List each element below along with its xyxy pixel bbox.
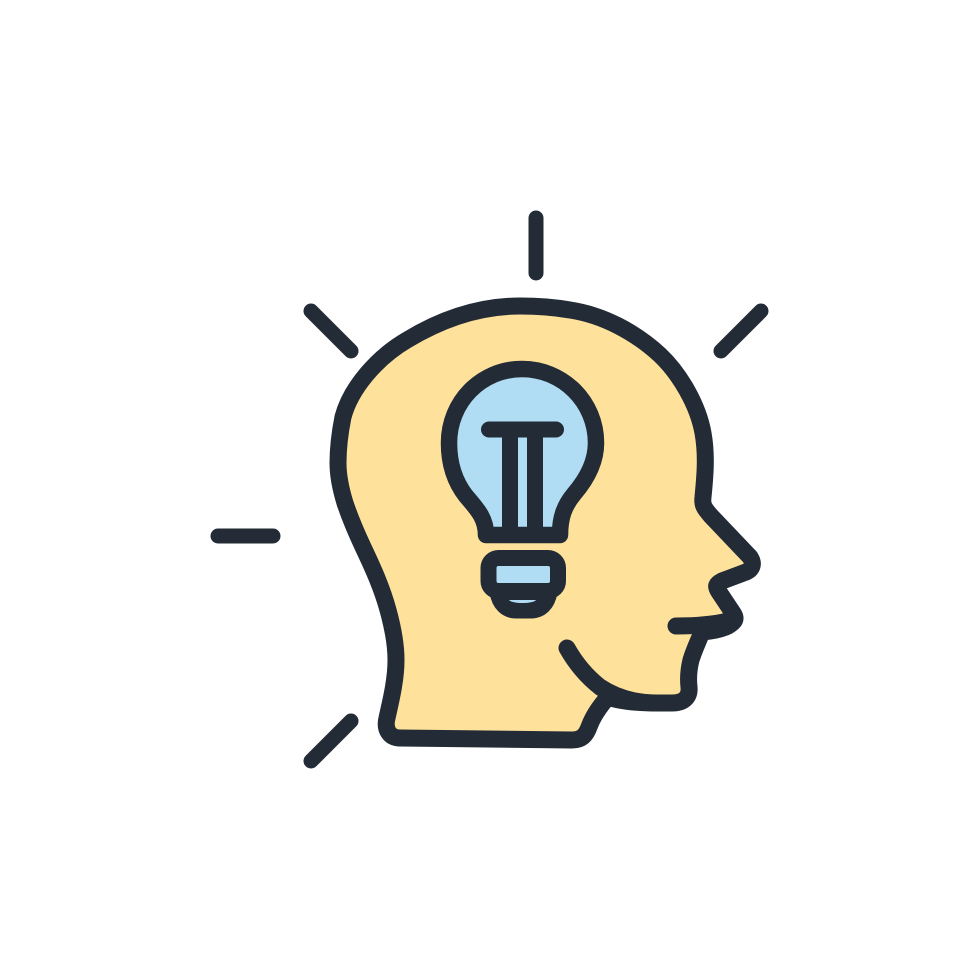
bulb glass (449, 369, 596, 535)
light rays (218, 218, 761, 761)
head silhouette (338, 306, 752, 740)
filament (489, 430, 556, 535)
socket bottom cap (497, 592, 550, 611)
light bulb (449, 369, 596, 611)
socket sliver highlight (509, 600, 536, 603)
socket (488, 558, 558, 591)
mouth line (676, 621, 728, 626)
jaw line (567, 648, 657, 703)
bulb base bar (486, 527, 560, 543)
